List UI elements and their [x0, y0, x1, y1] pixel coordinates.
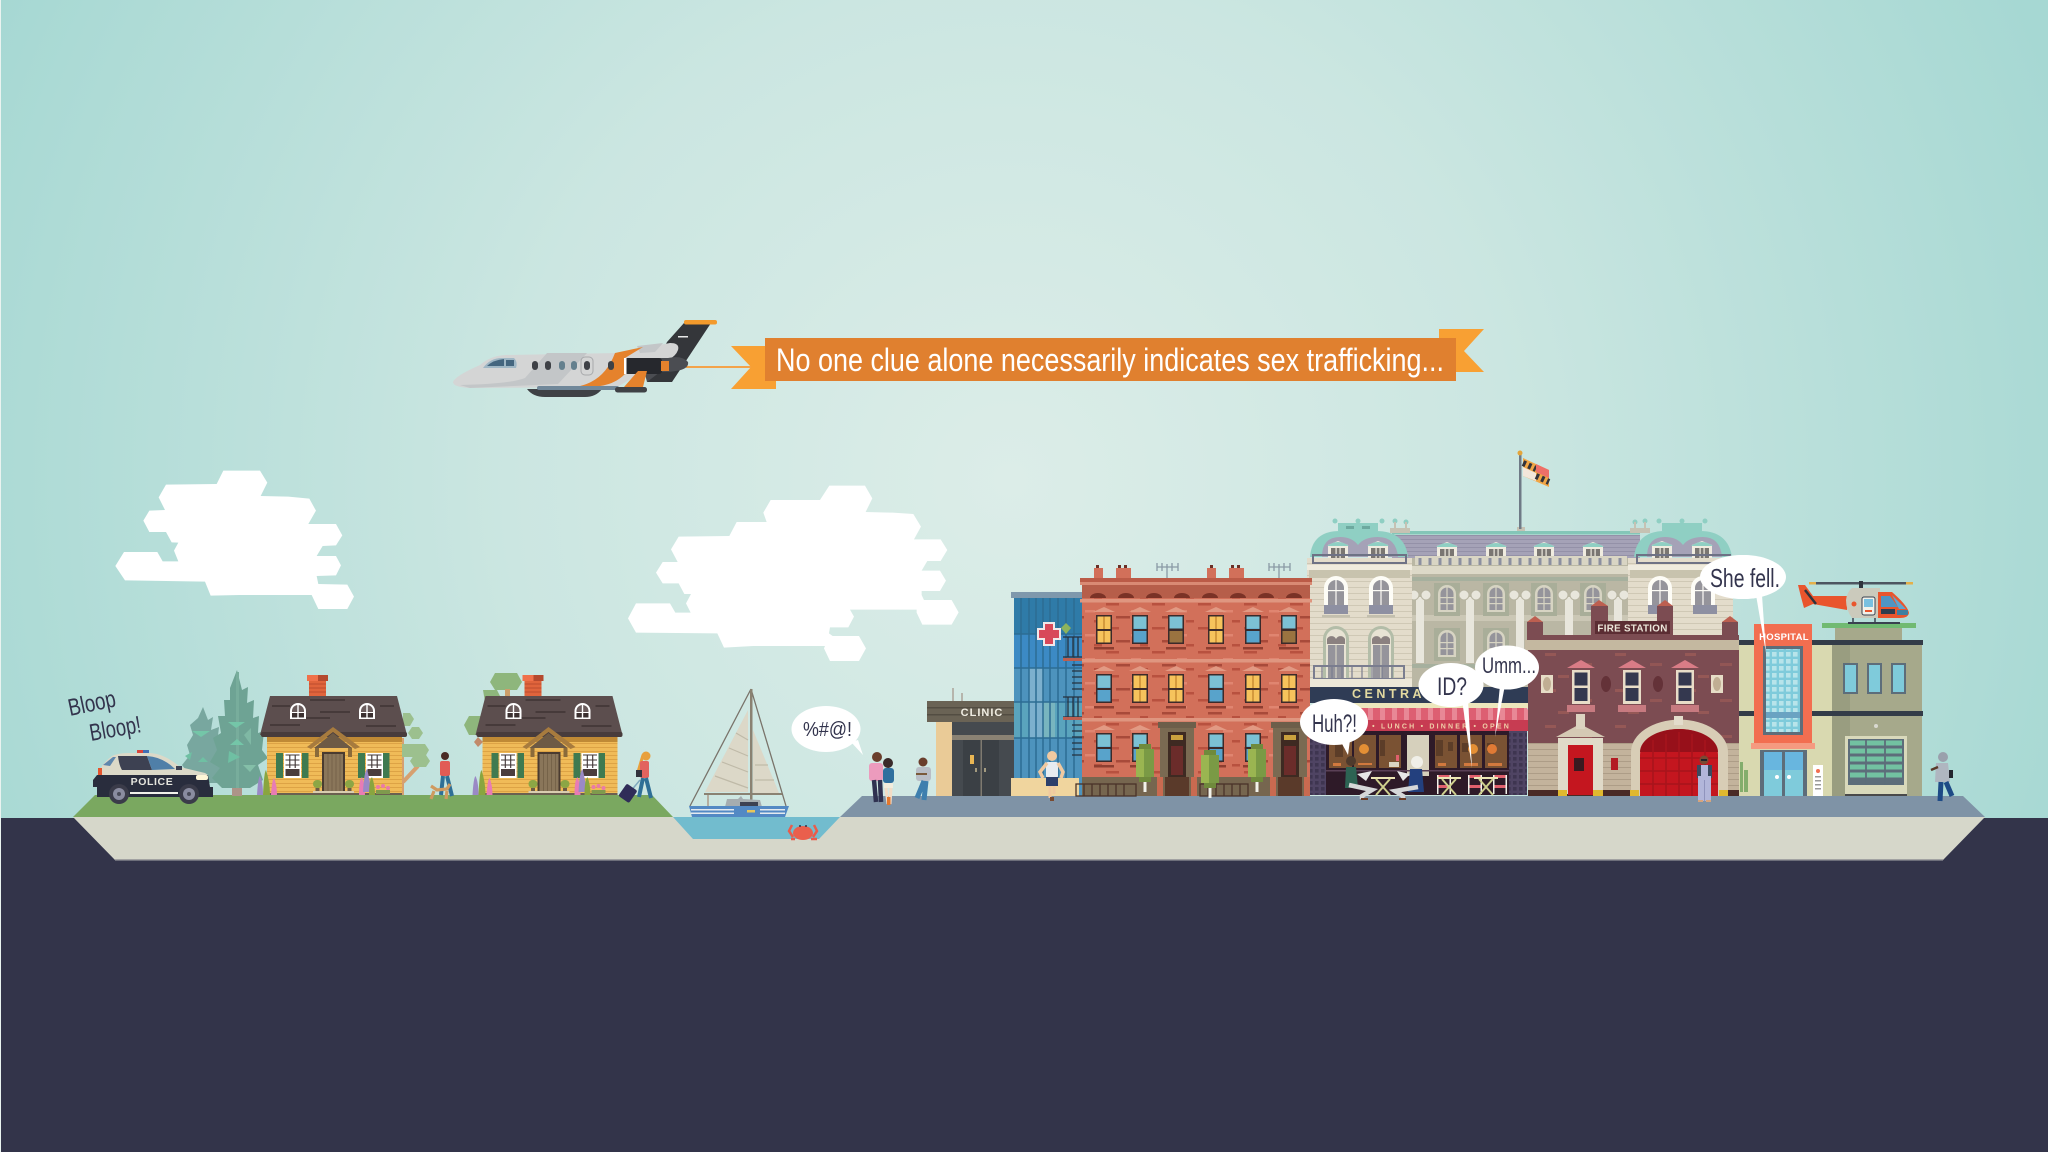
ambulance bay — [1845, 736, 1907, 796]
hospital doors — [1760, 750, 1807, 796]
clinic pedestal — [1011, 778, 1079, 796]
cloud left — [115, 471, 354, 609]
upper windows — [1567, 660, 1699, 712]
cafe tables — [1371, 777, 1498, 795]
fire station sign: FIRE STATION — [1597, 624, 1668, 634]
banner: right tail — [1439, 329, 1484, 372]
grass strip — [73, 795, 673, 817]
cafe sign text: CENTRAL — [1352, 687, 1436, 701]
palace centre roof — [1392, 535, 1640, 558]
palace right wing — [1628, 518, 1733, 638]
jogger — [1040, 751, 1063, 801]
antennas — [1157, 563, 1290, 578]
speech bubble: Huh — [1300, 699, 1368, 755]
sky background — [0, 0, 2048, 830]
street — [840, 796, 1985, 817]
garage door — [1630, 716, 1728, 796]
man walking with phone — [1931, 752, 1953, 801]
garden flowers — [257, 769, 606, 795]
windows row one — [1093, 607, 1300, 650]
parapet and towers — [1527, 606, 1739, 641]
banner text: No one clue alone necessarily indicates sex trafficking... — [776, 342, 1444, 378]
helicopter — [1798, 581, 1913, 624]
speech bubble: curse — [792, 706, 863, 755]
brick apartment building — [1076, 563, 1312, 798]
cafe chairs — [1437, 775, 1507, 794]
girl with backpack — [916, 758, 931, 800]
street trees — [1136, 744, 1266, 798]
palace building — [1307, 450, 1733, 688]
water — [673, 817, 840, 839]
tree behind second house — [464, 673, 522, 747]
tree behind first house — [400, 713, 430, 795]
house two — [476, 675, 622, 795]
hospital — [1739, 623, 1923, 796]
railings — [1076, 784, 1248, 796]
Bloop Bloop text — [66, 685, 143, 747]
speech bubble: Huh: Huh?! — [1312, 710, 1357, 738]
house one — [260, 675, 407, 795]
woman with suitcase — [618, 752, 651, 803]
banner: left tail — [731, 346, 776, 389]
dark lower band — [0, 818, 2048, 1152]
plane — [453, 320, 717, 397]
windows row two — [1093, 666, 1300, 708]
police car — [93, 750, 213, 804]
upper windows — [1844, 664, 1905, 693]
awning text: DRINKS • LUNCH • DINNER • OPEN — [1328, 724, 1511, 730]
flag — [1518, 450, 1549, 529]
diner in green — [1345, 756, 1372, 800]
woman with sunglasses — [1697, 756, 1712, 802]
Bloop Bloop text: Bloop — [66, 685, 118, 722]
speech bubble: Umm: Umm... — [1482, 653, 1536, 678]
side door — [1556, 714, 1605, 796]
couple walking — [869, 752, 894, 805]
speech bubble: ID?: ID? — [1437, 673, 1467, 701]
windows row three — [1093, 725, 1264, 768]
hospital sign: HOSPITAL — [1759, 632, 1809, 643]
plane tow line — [686, 366, 752, 368]
palace centre facade — [1412, 558, 1628, 688]
clinic sign: CLINIC — [961, 707, 1003, 719]
speech bubble: She fell: She fell. — [1710, 563, 1780, 593]
speech bubble: She fell — [1700, 555, 1786, 653]
base and stoops — [1082, 777, 1310, 796]
woman walking dog — [431, 752, 452, 799]
medical cross — [1038, 623, 1060, 645]
ground: concrete cross-section — [73, 795, 1985, 861]
fire station — [1525, 600, 1740, 796]
sailboat — [689, 689, 789, 817]
speech bubble: ID? — [1418, 663, 1484, 768]
cloud centre — [628, 486, 959, 661]
pine trees — [182, 670, 268, 796]
cafe — [1308, 687, 1533, 800]
police car: POLICE — [131, 776, 173, 788]
crab — [789, 825, 817, 840]
hospital tower — [1754, 624, 1812, 744]
speech bubble: Umm — [1475, 646, 1539, 737]
blue medical tower — [1011, 592, 1083, 796]
diner in blue — [1395, 756, 1424, 800]
clinic — [927, 688, 1015, 796]
Bloop Bloop text: Bloop! — [87, 711, 143, 747]
banner: main — [765, 338, 1456, 381]
palace left wing — [1307, 518, 1412, 688]
chimneys — [1094, 565, 1244, 578]
speech bubble: curse: %#@! — [803, 719, 852, 741]
